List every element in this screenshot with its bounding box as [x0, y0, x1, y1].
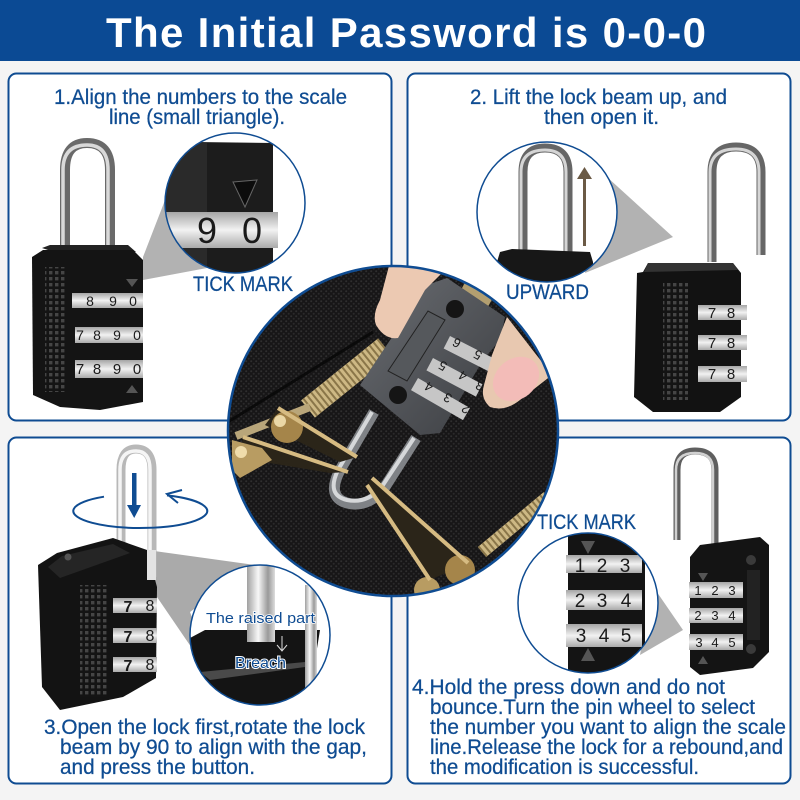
padlock back view: 3 [695, 635, 703, 650]
zoom cone [640, 585, 683, 655]
padlock closed: 9 [113, 361, 121, 378]
zoom cone [143, 195, 207, 280]
upper zipper [236, 288, 490, 436]
wheels [411, 335, 495, 420]
wheels: 2 [459, 401, 473, 417]
lock body [360, 278, 505, 435]
padlock back view: 1 [694, 583, 702, 598]
step 4 text: line.Release the lock for a rebound,and [430, 736, 783, 759]
padlock back view: 2 [711, 583, 719, 598]
zoom cone [147, 550, 255, 682]
magnifier: tick mark detail: 9 [197, 210, 217, 251]
breach label: Breach [235, 655, 286, 672]
central photo circle: lock on zipper [228, 262, 558, 603]
step 4 text: bounce.Turn the pin wheel to select [430, 696, 755, 719]
magnifier: wheels: 5 [621, 626, 631, 647]
tick mark label: TICK MARK [193, 273, 293, 296]
header banner [0, 0, 800, 61]
panel 1: align the numbers [8, 74, 392, 420]
wheels: 5 [471, 347, 485, 363]
padlock rotated: 8 [146, 598, 155, 615]
magnifier: wheels: 2 [597, 556, 607, 577]
padlock rotated [38, 449, 157, 710]
padlock closed: 0 [133, 361, 141, 378]
padlock closed [32, 143, 143, 410]
wheels: 4 [456, 368, 470, 384]
small arrow [277, 636, 287, 651]
padlock back view [676, 451, 769, 675]
magnifier: wheels: 1 [575, 556, 585, 577]
step 3 text [44, 716, 367, 779]
magnifier: upward arrow [477, 142, 617, 285]
tick mark label, panel 4: TICK MARK [537, 511, 636, 534]
padlock back view: 2 [694, 608, 702, 623]
padlock back view: 3 [711, 608, 719, 623]
magnifier: wheels [518, 530, 658, 680]
wheels: 3 [473, 378, 487, 394]
padlock with raised shackle: 7 [708, 335, 716, 352]
padlock rotated: 7 [124, 599, 133, 616]
step 2 heading: 2. Lift the lock beam up, and [470, 86, 727, 109]
padlock closed: 7 [76, 327, 84, 343]
magnifier: wheels: 3 [576, 626, 586, 647]
padlock with raised shackle: 8 [727, 305, 735, 322]
step 3 text: beam by 90 to align with the gap, [60, 736, 367, 759]
zoom cone [585, 177, 673, 273]
padlock closed: 8 [86, 293, 94, 309]
padlock closed: 0 [133, 327, 141, 343]
magnifier: wheels: 3 [597, 591, 607, 612]
magnifier: wheels: 4 [599, 626, 610, 647]
magnifier: wheels: 2 [575, 591, 585, 612]
padlock closed: 8 [93, 327, 101, 343]
step 2 heading: then open it. [544, 106, 659, 129]
upper sliders and pulls [232, 408, 357, 478]
panel 4: set the new number [408, 438, 790, 784]
fingers [375, 262, 552, 410]
padlock closed: 9 [113, 327, 121, 343]
padlock with raised shackle: 8 [727, 335, 735, 352]
step 3 text: and press the button. [60, 756, 255, 779]
step 3 text: 3.Open the lock first,rotate the lock [44, 716, 365, 739]
padlock closed: 9 [109, 293, 117, 309]
step 4 text: 4.Hold the press down and do not [412, 676, 725, 699]
padlock closed: 0 [129, 293, 137, 309]
wheels: 5 [436, 358, 450, 374]
lower sliders and pulls [367, 478, 475, 603]
padlock with raised shackle: 8 [727, 366, 735, 383]
down arrow [127, 473, 141, 518]
magnifier: wheels: 3 [620, 556, 630, 577]
magnifier: tick mark detail [160, 130, 305, 283]
magnifier: raised part and breach [190, 560, 330, 710]
step 1 heading [54, 86, 347, 129]
padlock back view: 3 [728, 583, 736, 598]
upward label: UPWARD [506, 281, 589, 304]
rotation arrow [73, 490, 207, 528]
padlock closed: 8 [93, 361, 101, 378]
padlock rotated: 8 [146, 628, 155, 645]
lower zipper [482, 497, 548, 552]
raised part label: The raised part [206, 610, 316, 627]
panel 2: lift the beam [408, 74, 790, 420]
padlock with raised shackle: 7 [708, 305, 716, 322]
shackle [334, 412, 416, 504]
step 4 text: the number you want to align the scale [430, 716, 786, 739]
wheels: 3 [441, 390, 455, 406]
padlock back view: 5 [728, 635, 736, 650]
padlock closed: 7 [76, 361, 84, 378]
title: The Initial Password is 0-0-0 [106, 9, 706, 56]
step 4 text [412, 676, 786, 779]
padlock rotated: 7 [124, 658, 133, 675]
wheels: 6 [450, 335, 464, 351]
wheels: 4 [422, 379, 436, 395]
padlock with raised shackle [634, 147, 761, 412]
brown arrow [577, 167, 592, 246]
magnifier: wheels: 4 [621, 591, 632, 612]
panel 3: rotate the beam [8, 438, 392, 784]
padlock back view: 4 [728, 608, 736, 623]
padlock rotated: 8 [146, 657, 155, 674]
step 4 text: the modification is successful. [430, 756, 699, 779]
padlock back view: 4 [711, 635, 719, 650]
step 1 heading: line (small triangle). [109, 106, 285, 129]
padlock with raised shackle: 7 [708, 366, 716, 383]
magnifier: tick mark detail: 0 [242, 210, 262, 251]
step 2 heading [470, 86, 727, 129]
padlock rotated: 7 [124, 629, 133, 646]
step 1 heading: 1.Align the numbers to the scale [54, 86, 347, 109]
